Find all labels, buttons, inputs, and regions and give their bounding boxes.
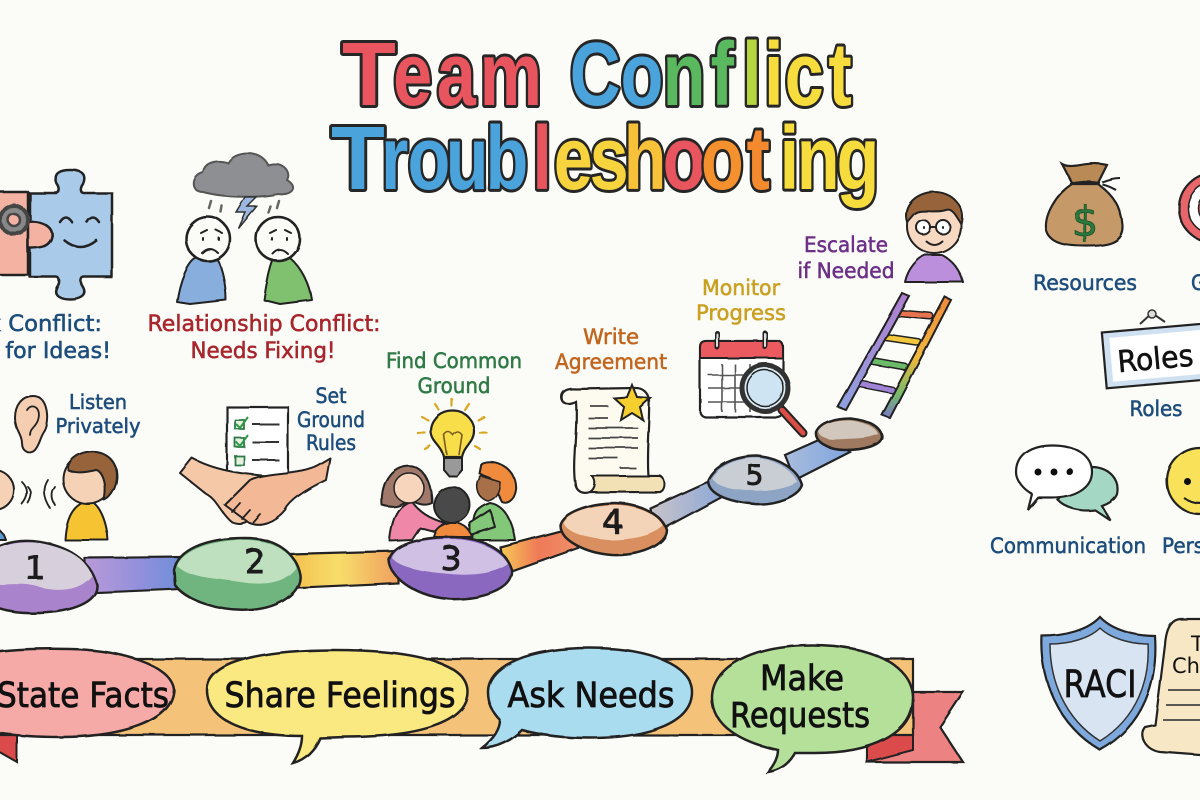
- stone 5: 5: [746, 459, 764, 492]
- panel: relationship conflict: [148, 153, 380, 364]
- text: listen privately: Privately: [56, 414, 141, 438]
- title line 2: Troubleshooting: o: [408, 109, 450, 209]
- stepping stones: [0, 418, 882, 613]
- speech bubble: make requests: Make: [760, 659, 844, 699]
- text: relationship conflict label: Needs Fixing!: [190, 339, 336, 364]
- title line 1: Team Conflict: l: [742, 25, 762, 125]
- stone 2: 2: [244, 542, 266, 581]
- text: write agreement: Write: [583, 325, 639, 349]
- text: monitor progress: Monitor: [702, 276, 780, 300]
- text: communication: Communication: [990, 534, 1146, 558]
- title line 1: Team Conflict: n: [663, 25, 705, 125]
- icon: team charter scroll: [1142, 619, 1200, 758]
- title line 1: Team Conflict: C: [570, 25, 620, 125]
- icon: storm cloud: [193, 153, 293, 228]
- title line 2: Troubleshooting: [331, 107, 879, 209]
- speech bubble: make requests: [712, 645, 913, 772]
- text: write agreement: [555, 325, 667, 374]
- icon: three collaborating people: [382, 462, 516, 541]
- text: relationship conflict label: [148, 312, 380, 364]
- text: relationship conflict label: Relationship Conflict:: [148, 312, 380, 337]
- text: task conflict label: [0, 312, 111, 364]
- timeline path segments: [85, 435, 850, 593]
- icon: person with glasses: [905, 192, 963, 282]
- icon: smiley: [1167, 448, 1200, 514]
- title line 2: Troubleshooting: g: [837, 109, 879, 209]
- icon: ear: [15, 396, 48, 452]
- step 4: write agreement: [555, 325, 667, 493]
- speech bubble: ask needs: [482, 648, 692, 748]
- title line 2: Troubleshooting: T: [331, 107, 385, 208]
- text: find common ground: Find Common: [386, 349, 522, 373]
- text: listen privately: [56, 390, 141, 438]
- icon: calendar with magnifier: [700, 333, 803, 433]
- text: set ground rules: Ground: [297, 408, 365, 432]
- title line 1: Team Conflict: m: [480, 25, 542, 125]
- step 5: monitor progress: [696, 276, 803, 433]
- icon: smile face: [60, 218, 99, 246]
- icon: scroll with star: [562, 385, 664, 493]
- step 3: find common ground: [382, 349, 522, 541]
- step 1: listen privately: [0, 390, 141, 540]
- title line 1: Team Conflict: e: [393, 25, 432, 125]
- icon: RACI shield: [1042, 617, 1155, 750]
- icon: handshake: [180, 458, 330, 524]
- icon: listening right person: [22, 451, 117, 540]
- title line 2: Troubleshooting: b: [486, 109, 528, 209]
- icon: rainbow ladder: [838, 293, 951, 418]
- title line 2: Troubleshooting: i: [780, 109, 799, 209]
- title line 2: Troubleshooting: r: [381, 109, 408, 209]
- title line 1: Team Conflict: o: [621, 25, 663, 125]
- stone 5: [708, 456, 802, 504]
- text: set ground rules: Set: [316, 384, 346, 408]
- title: [331, 23, 879, 209]
- text: monitor progress: [696, 276, 786, 325]
- stone 2: [174, 538, 300, 610]
- speech bubble: ask needs: Ask Needs: [508, 676, 674, 716]
- stone 6: [816, 418, 882, 450]
- icon: goals target: [1179, 173, 1200, 243]
- text: find common ground: Ground: [418, 374, 490, 398]
- stone 4: 4: [602, 502, 624, 541]
- step 2: set ground rules: [180, 384, 365, 524]
- icon: RACI shield: RACI: [1064, 663, 1136, 706]
- speech bubble: share feelings: [207, 650, 468, 763]
- text: resources: Resources: [1033, 271, 1137, 295]
- title line 1: Team Conflict: c: [785, 25, 824, 125]
- icon: chat bubbles: [1016, 445, 1118, 520]
- stone 3: 3: [440, 539, 462, 578]
- speech bubble: share feelings: Share Feelings: [224, 676, 456, 716]
- icon: money bag: $: [1072, 197, 1098, 246]
- step 6: escalate if needed: [798, 192, 963, 418]
- title line 2: Troubleshooting: n: [797, 109, 840, 209]
- text: escalate if needed: Escalate: [804, 233, 888, 257]
- icon: checklist: [227, 407, 288, 477]
- stone 1: 1: [24, 548, 46, 587]
- text: set ground rules: [297, 384, 365, 455]
- icon: talking left person: [0, 470, 14, 540]
- text: write agreement: Agreement: [555, 350, 667, 374]
- panel: root cause checklist: [990, 164, 1200, 758]
- text: find common ground: [386, 349, 522, 398]
- icon: gear: [0, 206, 28, 234]
- icon: money bag: [1046, 164, 1123, 246]
- banner ribbon band: [0, 659, 963, 762]
- icon: roles sign: [1102, 310, 1200, 388]
- text: listen privately: Listen: [69, 390, 127, 414]
- title line 1: Team Conflict: t: [828, 25, 852, 125]
- text: roles: Roles: [1130, 397, 1182, 421]
- text: escalate if needed: [798, 233, 894, 283]
- speech bubble: make requests: Requests: [730, 696, 870, 736]
- title line 1: Team Conflict: T: [342, 23, 396, 124]
- title line 2: Troubleshooting: l: [532, 109, 552, 209]
- text: monitor progress: Progress: [696, 301, 786, 325]
- title line 1: Team Conflict: f: [711, 25, 735, 125]
- title line 2: Troubleshooting: e: [554, 109, 593, 209]
- title line 2: Troubleshooting: h: [624, 109, 666, 209]
- title line 2: Troubleshooting: o: [701, 109, 744, 209]
- speech bubble: state facts: State Facts: [0, 676, 169, 716]
- speech bubble: state facts: [0, 649, 174, 737]
- stone 3: [389, 537, 512, 599]
- icon: light bulb: [418, 399, 487, 476]
- title line 1: Team Conflict: a: [437, 25, 477, 125]
- title line 2: Troubleshooting: o: [663, 109, 705, 209]
- icon: sad people: [177, 217, 312, 304]
- icon: roles sign: Roles: [1116, 339, 1195, 380]
- stone 1: [0, 541, 97, 613]
- icon: puzzle pieces: [0, 170, 112, 299]
- title line 1: Team Conflict: [342, 23, 852, 125]
- text: escalate if needed: if Needed: [798, 259, 894, 283]
- panel: task conflict: [0, 170, 112, 364]
- banner: four communication steps: [0, 645, 963, 772]
- stone 4: [560, 502, 667, 555]
- title line 2: Troubleshooting: t: [746, 109, 770, 209]
- title line 2: Troubleshooting: u: [446, 109, 489, 209]
- text: set ground rules: Rules: [306, 431, 356, 455]
- title line 1: Team Conflict: i: [764, 25, 784, 125]
- title line 2: Troubleshooting: s: [590, 109, 629, 209]
